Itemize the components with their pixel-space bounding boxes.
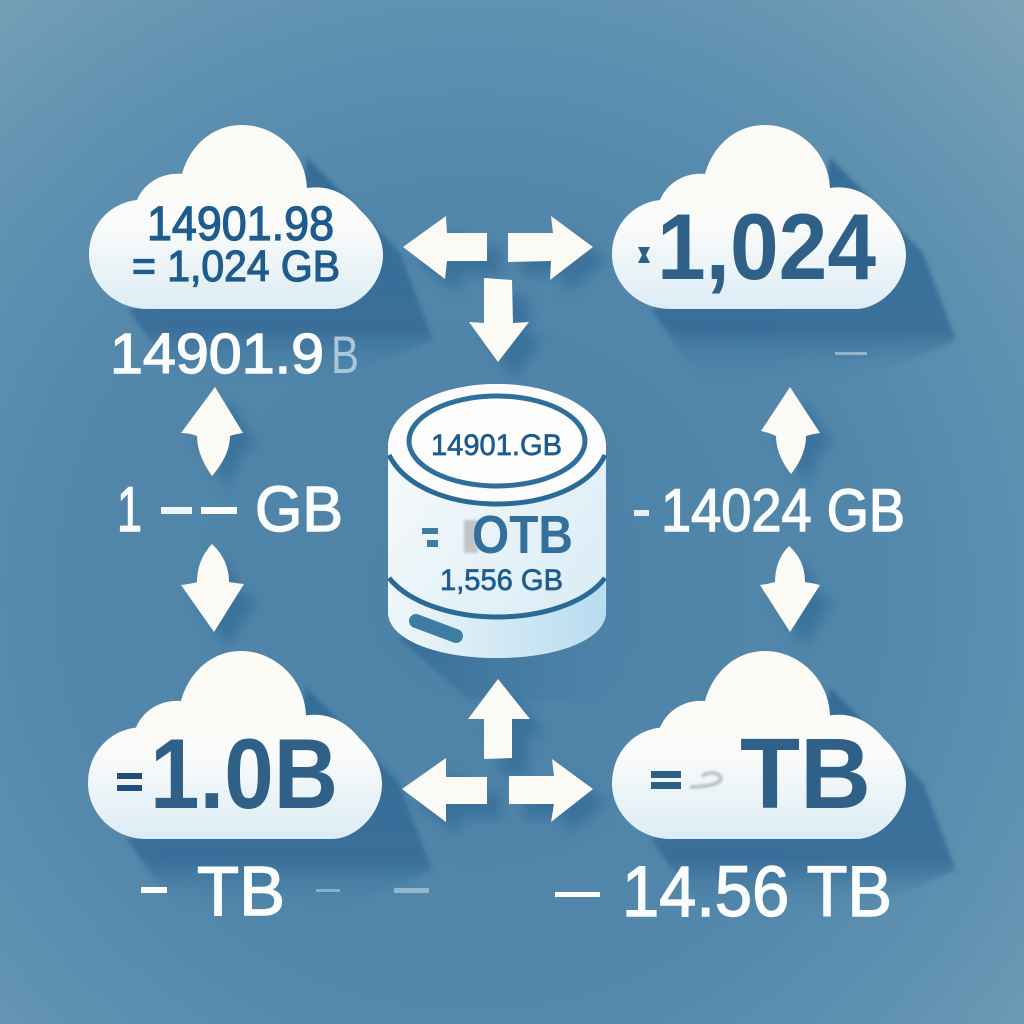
cylinder text: OTB [472,505,573,565]
label: 14901.9B: B [331,326,359,385]
arrow: top left-pointing [403,216,487,279]
cloud text: bottom left: 1.0B [150,718,338,829]
cylinder base band [388,578,606,658]
arrow: up to cylinder [468,679,530,759]
label: 14024 GB: 14024 GB [661,477,905,544]
label: TB [141,852,429,930]
cloud text: bottom right: TB [740,718,871,830]
label: 1 GB: 1 [117,475,142,545]
arrow: top right-pointing [508,216,593,280]
cloud: top right [612,125,956,380]
cylinder lid [388,384,606,503]
database cylinder [388,384,606,658]
cloud text: top left: 14901.98 [147,198,334,251]
faded dash: top right [835,352,867,355]
arrow: right column up [761,387,820,474]
cloud text: top right: 1,024 [657,194,876,299]
cloud: top left [89,125,433,380]
cloud text: top left [132,198,340,291]
cloud text: top left: = 1,024 GB [132,242,340,291]
label: 14.56 TB: 14.56 TB [622,853,892,932]
cylinder text: 1,556 GB [440,564,563,597]
label: 1 GB [117,473,343,545]
cylinder slot [416,621,456,636]
arrow: bottom right-pointing [509,759,593,822]
label: TB: TB [197,852,285,930]
cloud: bottom right [612,651,956,910]
cloud text: bottom right [651,718,871,830]
arrow: right column down [760,546,820,632]
arrow: down to cylinder [469,278,529,362]
label: 1 GB: GB [255,473,343,545]
cylinder text: 14901.GB [431,429,562,462]
arrow: left column up [181,387,243,476]
arrow: left column down [181,544,244,632]
cloud: bottom left [88,651,432,910]
arrow: bottom left-pointing [402,758,487,822]
label: 14901.9B: 14901.9 [110,322,324,386]
cylinder text [422,429,573,597]
